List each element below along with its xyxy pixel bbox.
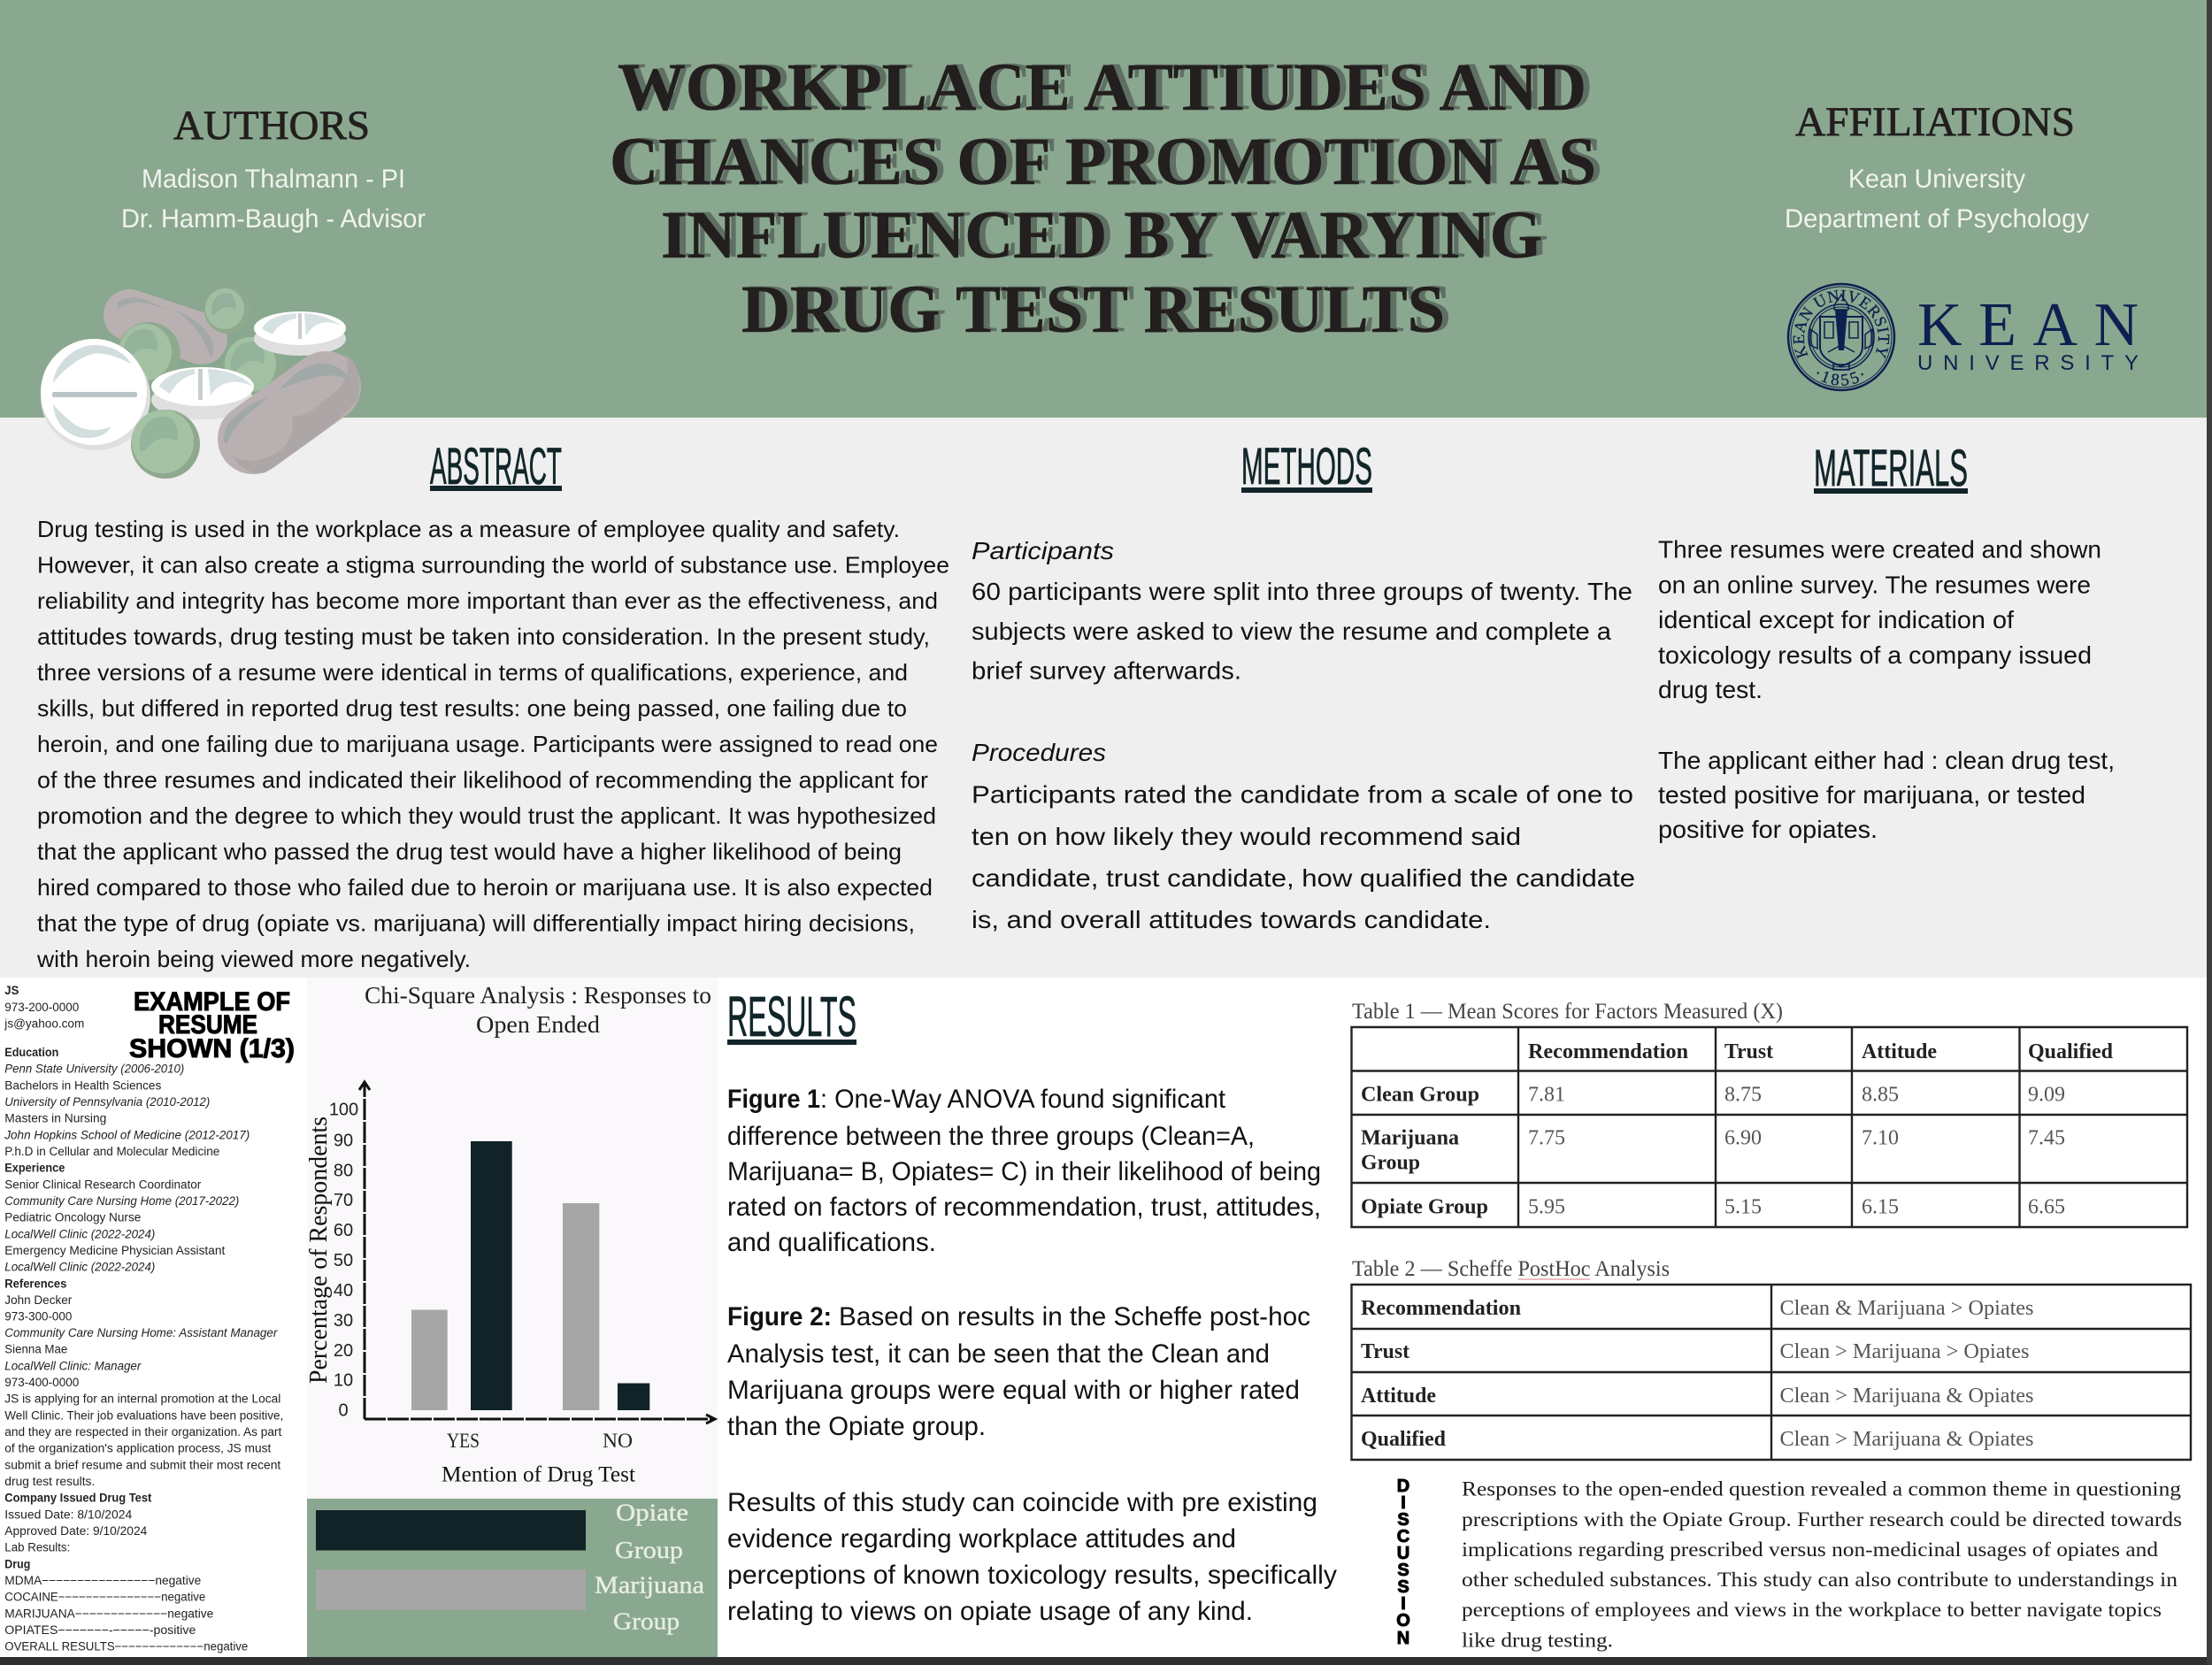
table 1 row: opiate: 5.95 bbox=[1528, 1196, 1565, 1219]
discussion text: Responses to the open-ended question revealed a common theme in questioning bbox=[1462, 1477, 2182, 1500]
y axis tick labels: 70 bbox=[334, 1191, 353, 1210]
resume body text: John Decker bbox=[4, 1293, 73, 1307]
y axis tick labels: 100 bbox=[329, 1101, 358, 1120]
resume body text: Issued Date: 8/10/2024 bbox=[4, 1508, 133, 1521]
results text: evidence regarding workplace attitudes and bbox=[727, 1524, 1236, 1554]
legend swatch opiate bbox=[316, 1510, 586, 1550]
abstract text: that the type of drug (opiate vs. marijuana) will differentially impact hiring decisions, bbox=[37, 909, 915, 936]
table 1 row: marijuana: 7.75 bbox=[1528, 1127, 1565, 1150]
heading: results bbox=[727, 985, 856, 1048]
affiliation names: Department of Psychology bbox=[1785, 204, 2089, 234]
participants subheading: Participants bbox=[972, 537, 1114, 564]
y axis with arrow bbox=[359, 1082, 370, 1419]
resume body text: LocalWell Clinic: Manager bbox=[4, 1359, 142, 1372]
table 1 row: clean: Clean Group bbox=[1361, 1083, 1479, 1106]
results text: than the Opiate group. bbox=[727, 1412, 986, 1441]
bar: yes marijuana bbox=[411, 1309, 448, 1410]
chart title: Chi-Square Analysis : Responses to bbox=[365, 982, 711, 1009]
materials text: positive for opiates. bbox=[1658, 816, 1878, 843]
icon: university seal: ·1855· bbox=[1817, 372, 1863, 386]
resume body text: University of Pennsylvania (2010-2012) bbox=[4, 1095, 210, 1109]
resume body text: drug test results. bbox=[4, 1475, 95, 1488]
discussion vertical heading: N bbox=[1397, 1629, 1409, 1648]
discussion text: implications regarding prescribed versus non-medicinal usages of opiates and bbox=[1462, 1538, 2159, 1561]
authors block bbox=[121, 103, 426, 234]
title: WORKPLACE ATTIUDES AND bbox=[618, 50, 1586, 125]
heading: abstract bbox=[430, 438, 562, 495]
resume heading: SHOWN (1/3) bbox=[129, 1034, 295, 1063]
body band bbox=[0, 418, 2212, 978]
green pill small bbox=[204, 288, 250, 334]
resume body text: Pediatric Oncology Nurse bbox=[4, 1211, 141, 1224]
resume heading: EXAMPLE OF bbox=[134, 987, 290, 1017]
table 1 row: marijuana: Group bbox=[1361, 1152, 1420, 1175]
resume heading: RESUME bbox=[158, 1010, 257, 1040]
resume body text: and they are respected in their organization. As part bbox=[4, 1425, 282, 1439]
title: INFLUENCED BY VARYING bbox=[661, 198, 1542, 272]
icon: university seal bbox=[1787, 283, 1895, 391]
gray capsule front bbox=[224, 354, 359, 473]
discussion vertical heading: I bbox=[1401, 1493, 1406, 1513]
discussion vertical heading: I bbox=[1401, 1594, 1406, 1614]
resume body text: OVERALL RESULTS−−−−−−−−−−−−−negative bbox=[4, 1640, 248, 1653]
table 2 row: recommendation: Recommendation bbox=[1361, 1297, 1521, 1320]
discussion text bbox=[1462, 1477, 2182, 1651]
table 2 row: attitude: Clean > Marijuana & Opiates bbox=[1780, 1385, 2033, 1408]
table 1 row: marijuana bbox=[1361, 1127, 2065, 1175]
abstract text: that the applicant who passed the drug test would have a higher likelihood of being bbox=[37, 839, 902, 865]
results text: relating to views on opiate usage of any kind. bbox=[727, 1597, 1253, 1626]
table 1 row: clean: 8.75 bbox=[1724, 1083, 1762, 1106]
abstract text: However, it can also create a stigma surrounding the world of substance use. Employee bbox=[37, 552, 949, 579]
resume body text: Drug bbox=[4, 1557, 30, 1570]
table 2 row: recommendation bbox=[1361, 1297, 2033, 1320]
resume body text: Experience bbox=[4, 1162, 65, 1175]
resume body text: 973-200-0000 bbox=[4, 1001, 79, 1014]
results text: Based on results in the Scheffe post-hoc bbox=[839, 1302, 1310, 1331]
heading: materials bbox=[1814, 440, 1968, 497]
resume body text: LocalWell Clinic (2022-2024) bbox=[4, 1261, 155, 1274]
bar: yes opiate bbox=[471, 1141, 512, 1410]
table 2 row: trust: Trust bbox=[1361, 1340, 1409, 1363]
resume body text: Community Care Nursing Home: Assistant Manager bbox=[4, 1326, 278, 1339]
procedures body: Participants rated the candidate from a scale of one to bbox=[972, 780, 1633, 809]
chart background bbox=[307, 978, 718, 1499]
y axis tick labels: 50 bbox=[334, 1251, 353, 1270]
legend swatch marijuana bbox=[316, 1569, 586, 1610]
results text: difference between the three groups (Clean=A, bbox=[727, 1122, 1255, 1151]
results text: Figure 1 bbox=[727, 1085, 820, 1114]
table 2 row: attitude: Attitude bbox=[1361, 1385, 1436, 1408]
icon: Kean University logo bbox=[1787, 283, 2139, 391]
resume body text bbox=[4, 984, 283, 1653]
results text: and qualifications. bbox=[727, 1228, 936, 1257]
abstract text: hired compared to those who failed due to heroin or marijuana use. It is also expected bbox=[37, 874, 933, 901]
y axis tick labels: 60 bbox=[334, 1221, 353, 1240]
discussion vertical heading: S bbox=[1397, 1577, 1409, 1597]
legend labels: Group bbox=[613, 1608, 680, 1635]
methods text bbox=[972, 537, 1635, 933]
results text bbox=[727, 1085, 1337, 1626]
text: ABSTRACT bbox=[430, 438, 562, 495]
resume body text: P.h.D in Cellular and Molecular Medicine bbox=[4, 1145, 219, 1158]
table 1 header row: Recommendation bbox=[1528, 1040, 1688, 1063]
table 2 row: qualified bbox=[1361, 1428, 2033, 1451]
materials text: toxicology results of a company issued bbox=[1658, 641, 2092, 669]
y axis tick labels: 40 bbox=[334, 1281, 353, 1301]
y axis tick labels bbox=[329, 1101, 358, 1421]
results text: Figure 2: bbox=[727, 1302, 832, 1331]
resume body text: Masters in Nursing bbox=[4, 1112, 106, 1125]
resume body text: submit a brief resume and submit their most recent bbox=[4, 1458, 281, 1471]
bar: no marijuana bbox=[563, 1203, 599, 1410]
resume body text: JS is applying for an internal promotion at the Local bbox=[4, 1393, 280, 1406]
table 2 row: qualified: Clean > Marijuana & Opiates bbox=[1780, 1428, 2033, 1451]
title bbox=[610, 50, 1596, 347]
abstract text: of the three resumes and indicated their likelihood of recommending the applicant for bbox=[37, 766, 928, 793]
discussion vertical heading: U bbox=[1397, 1544, 1409, 1563]
table 2 row: trust bbox=[1361, 1340, 2030, 1363]
abstract text: Drug testing is used in the workplace as a measure of employee quality and safety. bbox=[37, 516, 900, 542]
resume body text: John Hopkins School of Medicine (2012-2017) bbox=[4, 1128, 250, 1141]
procedures body: is, and overall attitudes towards candidate. bbox=[972, 906, 1491, 933]
resume body text: of the organization's application process, JS must bbox=[4, 1442, 272, 1455]
legend labels bbox=[595, 1499, 704, 1635]
x axis with arrow bbox=[365, 1415, 715, 1423]
discussion vertical heading: O bbox=[1396, 1611, 1410, 1630]
y axis tick labels: 80 bbox=[334, 1161, 353, 1180]
discussion vertical heading: S bbox=[1397, 1510, 1409, 1530]
x category labels bbox=[447, 1430, 633, 1452]
procedures body bbox=[972, 780, 1635, 933]
wordmark KEAN: KEAN bbox=[1917, 291, 2139, 359]
bars bbox=[411, 1141, 649, 1410]
legend labels: Marijuana bbox=[595, 1571, 704, 1598]
legend labels: Group bbox=[615, 1537, 683, 1563]
y axis tick labels: 10 bbox=[334, 1371, 353, 1391]
resume body text: COCAINE−−−−−−−−−−−−−−−negative bbox=[4, 1591, 205, 1604]
materials text bbox=[1658, 536, 2115, 843]
icon: university seal: KEAN UNIVERSITY bbox=[1793, 290, 1890, 359]
white tablet top right bbox=[254, 311, 346, 356]
resume heading bbox=[129, 987, 295, 1063]
table 1 row: marijuana: Marijuana bbox=[1361, 1127, 1459, 1150]
resume body text: Senior Clinical Research Coordinator bbox=[4, 1178, 202, 1191]
chart title: Open Ended bbox=[476, 1011, 601, 1038]
participants body: subjects were asked to view the resume and complete a bbox=[972, 618, 1611, 645]
abstract text: attitudes towards, drug testing must be taken into consideration. In the present study, bbox=[37, 623, 930, 649]
table 2 row: qualified: Qualified bbox=[1361, 1428, 1447, 1451]
y axis tick labels: 90 bbox=[334, 1131, 353, 1150]
green pill center bbox=[223, 335, 285, 397]
abstract text: skills, but differed in reported drug test results: one being passed, one failing due to bbox=[37, 695, 907, 722]
table 2 row: attitude bbox=[1361, 1385, 2033, 1408]
heading: methods bbox=[1241, 438, 1372, 495]
header band bbox=[0, 0, 2212, 418]
resume body text: 973-400-0000 bbox=[4, 1376, 79, 1389]
abstract text: promotion and the degree to which they would trust the applicant. It was hypothesized bbox=[37, 802, 936, 829]
discussion text: prescriptions with the Opiate Group. Further research could be directed towards bbox=[1462, 1508, 2182, 1531]
participants body: 60 participants were split into three groups of twenty. The bbox=[972, 578, 1632, 605]
discussion vertical heading: D bbox=[1397, 1477, 1409, 1496]
title: CHANCES OF PROMOTION AS bbox=[610, 125, 1596, 199]
resume body text: js@yahoo.com bbox=[4, 1017, 84, 1031]
resume body text: Penn State University (2006-2010) bbox=[4, 1063, 184, 1076]
resume body text: JS bbox=[4, 984, 19, 997]
author names: Dr. Hamm-Baugh - Advisor bbox=[121, 204, 426, 234]
resume body text: Community Care Nursing Home (2017-2022) bbox=[4, 1194, 239, 1208]
resume body text: Company Issued Drug Test bbox=[4, 1492, 152, 1505]
wordmark UNIVERSITY: UNIVERSITY bbox=[1917, 351, 2139, 375]
resume body text: LocalWell Clinic (2022-2024) bbox=[4, 1227, 155, 1240]
resume body text: MDMA−−−−−−−−−−−−−−−−negative bbox=[4, 1574, 201, 1587]
green pill left bbox=[117, 322, 180, 386]
discussion text: perceptions of employees and views in the workplace to better navigate topics bbox=[1462, 1599, 2162, 1621]
discussion vertical heading: C bbox=[1397, 1527, 1409, 1546]
table 1 row: marijuana: 7.45 bbox=[2028, 1127, 2065, 1150]
results text: Marijuana= B, Opiates= C) in their likelihood of being bbox=[727, 1157, 1321, 1186]
y axis title: Percentage of Respondents bbox=[304, 1116, 333, 1384]
materials text: Three resumes were created and shown bbox=[1658, 536, 2101, 563]
procedures body: ten on how likely they would recommend said bbox=[972, 823, 1521, 850]
table 1 row: opiate: 6.15 bbox=[1862, 1196, 1899, 1219]
author names bbox=[121, 165, 426, 234]
abstract text: with heroin being viewed more negatively. bbox=[36, 946, 471, 972]
resume body text: Well Clinic. Their job evaluations have been positive, bbox=[4, 1408, 283, 1422]
results text: rated on factors of recommendation, trust, attitudes, bbox=[727, 1193, 1321, 1222]
table 1 row: clean bbox=[1361, 1083, 2065, 1106]
participants body bbox=[972, 578, 1632, 685]
legend labels: Opiate bbox=[616, 1499, 688, 1525]
green pill bottom bbox=[131, 410, 200, 479]
table 1 row: opiate: 6.65 bbox=[2028, 1196, 2065, 1219]
materials text: identical except for indication of bbox=[1658, 606, 2014, 633]
resume body text: 973-300-000 bbox=[4, 1310, 72, 1324]
bar: no opiate bbox=[618, 1384, 649, 1410]
participants body: brief survey afterwards. bbox=[972, 656, 1241, 685]
heading: methods: METHODS bbox=[1241, 438, 1372, 495]
resume body text: MARIJUANA−−−−−−−−−−−−−negative bbox=[4, 1607, 213, 1620]
table 1 row: marijuana: 7.10 bbox=[1862, 1127, 1899, 1150]
y axis tick labels: 30 bbox=[334, 1311, 353, 1331]
discussion text: like drug testing. bbox=[1462, 1630, 1613, 1651]
table 1 row: clean: 8.85 bbox=[1862, 1083, 1899, 1106]
white tablet center bbox=[151, 367, 254, 419]
resume body text: Education bbox=[4, 1046, 58, 1059]
abstract text: three versions of a resume were identical in terms of qualifications, experience, and bbox=[37, 659, 908, 686]
table 2 row: recommendation: Clean & Marijuana > Opiates bbox=[1780, 1297, 2033, 1320]
results text: Analysis test, it can be seen that the Clean and bbox=[727, 1339, 1270, 1369]
abstract text: reliability and integrity has become more important than ever as the effectiveness, and bbox=[37, 587, 938, 614]
y axis tick labels: 20 bbox=[334, 1341, 353, 1361]
gray capsule back bbox=[117, 298, 213, 358]
table 1 header row: Qualified bbox=[2028, 1040, 2114, 1063]
resume body text: Emergency Medicine Physician Assistant bbox=[4, 1244, 226, 1257]
resume body text: Bachelors in Health Sciences bbox=[4, 1078, 162, 1092]
panel: resume example bbox=[4, 984, 295, 1653]
table 1: mean scores bbox=[1352, 1027, 2187, 1227]
procedures body: candidate, trust candidate, how qualified the candidate bbox=[972, 864, 1635, 892]
results text: perceptions of known toxicology results, specifically bbox=[727, 1561, 1337, 1590]
table 1 row: opiate bbox=[1361, 1196, 2065, 1219]
resume body text: OPIATES−−−−−−−-−−−−−-positive bbox=[4, 1623, 196, 1637]
author names: Madison Thalmann - PI bbox=[142, 165, 405, 194]
materials text: drug test. bbox=[1658, 676, 1763, 703]
abstract text bbox=[36, 516, 949, 972]
heading: results: RESULTS bbox=[727, 985, 856, 1048]
table 1 header row bbox=[1528, 1040, 2114, 1063]
x category labels: YES bbox=[447, 1430, 480, 1452]
table 1 row: clean: 7.81 bbox=[1528, 1083, 1565, 1106]
x category labels: NO bbox=[603, 1430, 633, 1452]
white pill large bbox=[41, 339, 150, 450]
bottom window edge bbox=[0, 1657, 2212, 1665]
table 1 row: marijuana: 6.90 bbox=[1724, 1127, 1762, 1150]
table 1 row: opiate: 5.15 bbox=[1724, 1196, 1762, 1219]
discussion vertical heading: S bbox=[1397, 1561, 1409, 1580]
authors heading: AUTHORS bbox=[173, 103, 370, 149]
discussion text: other scheduled substances. This study can also contribute to understandings in bbox=[1462, 1569, 2178, 1591]
results text: : One-Way ANOVA found significant bbox=[820, 1085, 1225, 1114]
affiliations block bbox=[1785, 99, 2089, 234]
y axis tick labels: 0 bbox=[338, 1401, 349, 1421]
procedures subheading: Procedures bbox=[972, 739, 1106, 766]
table 1 caption: Table 1 — Mean Scores for Factors Measured (X) bbox=[1352, 1000, 1783, 1024]
resume body text: References bbox=[4, 1277, 66, 1290]
results text: Results of this study can coincide with pre existing bbox=[727, 1488, 1317, 1517]
affiliation names: Kean University bbox=[1848, 165, 2025, 194]
table 1 row: clean: 9.09 bbox=[2028, 1083, 2065, 1106]
panel: chi-square chart bbox=[304, 982, 715, 1486]
heading: materials: MATERIALS bbox=[1814, 440, 1968, 497]
resume body text: Lab Results: bbox=[4, 1541, 70, 1554]
materials text: tested positive for marijuana, or tested bbox=[1658, 781, 2085, 809]
table 2 caption: Table 2 — Scheffe PostHoc Analysis bbox=[1352, 1257, 1670, 1281]
abstract text: heroin, and one failing due to marijuana usage. Participants were assigned to read one bbox=[37, 731, 938, 757]
table 1 header row: Trust bbox=[1724, 1040, 1773, 1063]
table 2 row: trust: Clean > Marijuana > Opiates bbox=[1780, 1340, 2030, 1363]
x axis title: Mention of Drug Test bbox=[442, 1463, 635, 1486]
resume body text: Sienna Mae bbox=[4, 1343, 67, 1356]
affiliations heading: AFFILIATIONS bbox=[1795, 99, 2075, 145]
materials text: The applicant either had : clean drug test, bbox=[1658, 747, 2115, 774]
affiliation names bbox=[1785, 165, 2089, 234]
table 1 row: opiate: Opiate Group bbox=[1361, 1196, 1488, 1219]
table 1 header row: Attitude bbox=[1862, 1040, 1937, 1063]
chart title bbox=[365, 982, 711, 1038]
icon: pills illustration bbox=[41, 288, 359, 479]
resume body text: Approved Date: 9/10/2024 bbox=[4, 1524, 148, 1538]
title: DRUG TEST RESULTS bbox=[741, 272, 1445, 347]
panel: chart legend bbox=[307, 1499, 718, 1657]
table 2: post hoc bbox=[1352, 1285, 2191, 1460]
right window edge bbox=[2207, 0, 2212, 1665]
materials text: on an online survey. The resumes were bbox=[1658, 572, 2091, 598]
results text: Marijuana groups were equal with or higher rated bbox=[727, 1376, 1300, 1405]
